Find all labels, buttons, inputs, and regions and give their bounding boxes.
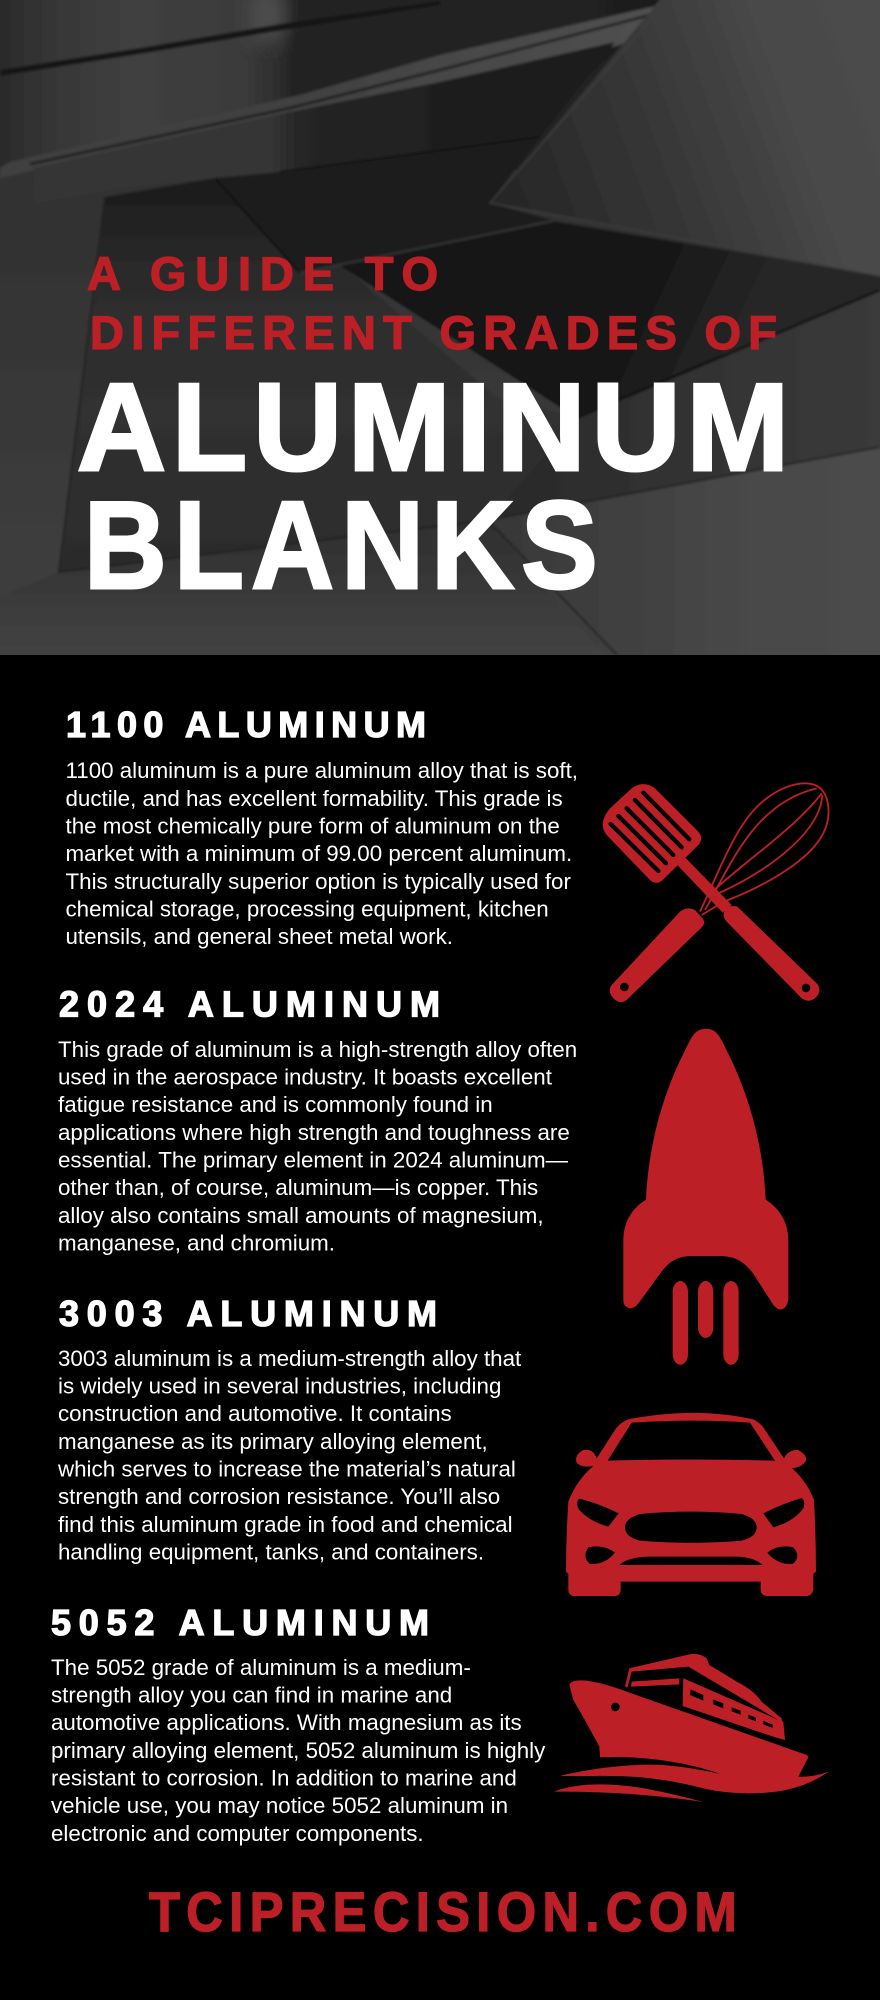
header panel [0, 0, 880, 670]
heading: 1100 aluminum: 1100 ALUMINUM [66, 704, 426, 745]
body text: 1100 aluminum: chemical storage, processing equipment, kitchen [66, 896, 549, 922]
icon: ship on waves [554, 1654, 829, 1802]
title line: BLANKS: BLANKS [84, 477, 605, 615]
heading: 2024 aluminum: 2024 ALUMINUM [59, 984, 440, 1024]
body text: 3003 aluminum: 3003 aluminum is a medium-strength alloy that [58, 1346, 522, 1371]
body text: 1100 aluminum: 1100 aluminum is a pure aluminum alloy that is soft, [66, 758, 578, 783]
body text: 5052 aluminum: strength alloy you can find in marine and [51, 1682, 452, 1708]
body text: 2024 aluminum [58, 1037, 577, 1256]
section: 5052 aluminum [51, 1602, 546, 1846]
section: 2024 aluminum [58, 984, 577, 1256]
body text: 5052 aluminum: electronic and computer components. [51, 1821, 424, 1846]
title line: A GUIDE TO: A GUIDE TO [87, 247, 438, 300]
heading: 5052 aluminum: 5052 ALUMINUM [51, 1602, 429, 1643]
body text: 1100 aluminum: utensils, and general sheet metal work. [66, 924, 453, 949]
body text: 2024 aluminum: essential. The primary element in 2024 aluminum— [58, 1148, 569, 1172]
body text: 2024 aluminum: fatigue resistance and is commonly found in [58, 1092, 493, 1117]
section: 1100 aluminum [66, 704, 578, 949]
body text: 5052 aluminum [51, 1655, 546, 1846]
icon: rocket [623, 1029, 788, 1365]
body text: 5052 aluminum: primary alloying element, 5052 aluminum is highly [51, 1738, 546, 1763]
body text: 2024 aluminum: applications where high strength and toughness are [58, 1120, 570, 1145]
body text: 1100 aluminum: This structurally superior option is typically used for [66, 869, 571, 894]
body text: 5052 aluminum: automotive applications. With magnesium as its [51, 1710, 522, 1735]
body text: 1100 aluminum [66, 758, 578, 949]
body text: 3003 aluminum: is widely used in several industries, including [58, 1374, 501, 1398]
heading: 3003 aluminum: 3003 ALUMINUM [59, 1293, 437, 1334]
body text: 5052 aluminum: The 5052 grade of aluminum is a medium- [51, 1655, 471, 1680]
body text: 2024 aluminum: This grade of aluminum is a high-strength alloy often [58, 1037, 577, 1062]
body text: 3003 aluminum: construction and automotive. It contains [58, 1401, 452, 1426]
body text: 2024 aluminum: manganese, and chromium. [58, 1230, 335, 1256]
header photo: aluminum sheets [0, 0, 880, 670]
body text: 3003 aluminum: manganese as its primary alloying element, [58, 1429, 488, 1454]
body text: 3003 aluminum: find this aluminum grade in food and chemical [58, 1512, 513, 1537]
footer website: TCIPRECISION.COM [149, 1880, 743, 1943]
body text: 3003 aluminum: handling equipment, tanks, and containers. [58, 1540, 484, 1564]
title line: DIFFERENT GRADES OF: DIFFERENT GRADES OF [90, 306, 777, 359]
title line: ALUMINUM: ALUMINUM [77, 359, 795, 497]
body text: 5052 aluminum: vehicle use, you may notice 5052 aluminum in [51, 1793, 508, 1818]
body text: 2024 aluminum: used in the aerospace industry. It boasts excellent [58, 1064, 553, 1090]
body text: 1100 aluminum: ductile, and has excellent formability. This grade is [66, 786, 563, 811]
body text: 3003 aluminum: strength and corrosion resistance. You’ll also [58, 1484, 500, 1509]
icon: crossed spatula and whisk [603, 783, 829, 1002]
body text: 3003 aluminum [57, 1346, 522, 1564]
body text: 2024 aluminum: other than, of course, aluminum—is copper. This [58, 1175, 538, 1200]
icon: car front [566, 1413, 816, 1596]
body text: 1100 aluminum: market with a minimum of 99.00 percent aluminum. [66, 841, 572, 866]
body text: 2024 aluminum: alloy also contains small amounts of magnesium, [58, 1203, 544, 1228]
section: 3003 aluminum [57, 1293, 522, 1564]
body text: 3003 aluminum: which serves to increase the material’s natural [57, 1456, 516, 1482]
body text: 1100 aluminum: the most chemically pure form of aluminum on the [66, 814, 560, 838]
body text: 5052 aluminum: resistant to corrosion. In addition to marine and [51, 1766, 517, 1790]
